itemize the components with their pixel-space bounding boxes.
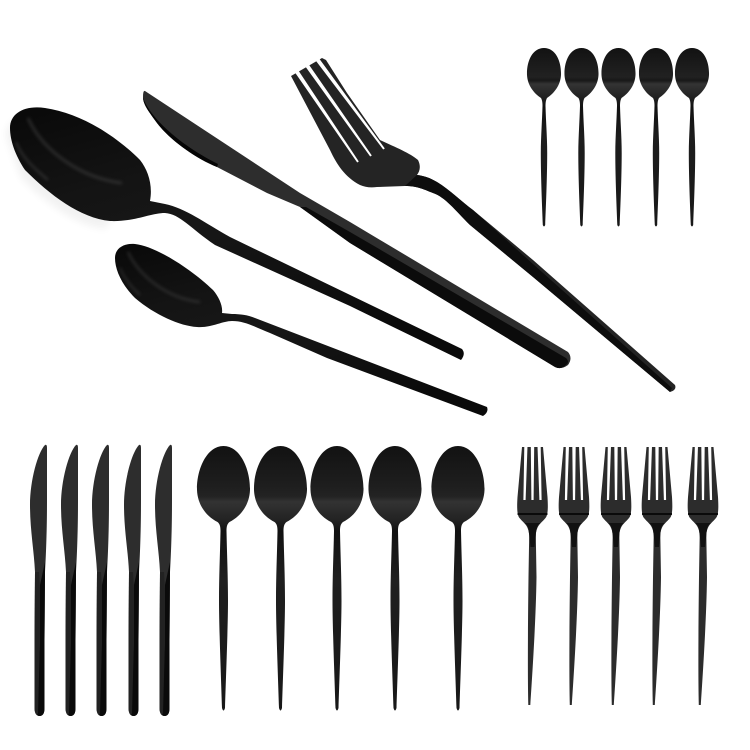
large knife xyxy=(143,91,570,368)
set of five teaspoons, top right xyxy=(527,48,709,226)
small spoon xyxy=(115,244,488,416)
large fork xyxy=(291,58,675,392)
set of five forks, bottom right xyxy=(517,446,718,705)
set of five dinner spoons, bottom centre xyxy=(197,446,485,710)
large serving spoon xyxy=(6,107,464,360)
set of five knives, bottom left xyxy=(30,445,172,716)
